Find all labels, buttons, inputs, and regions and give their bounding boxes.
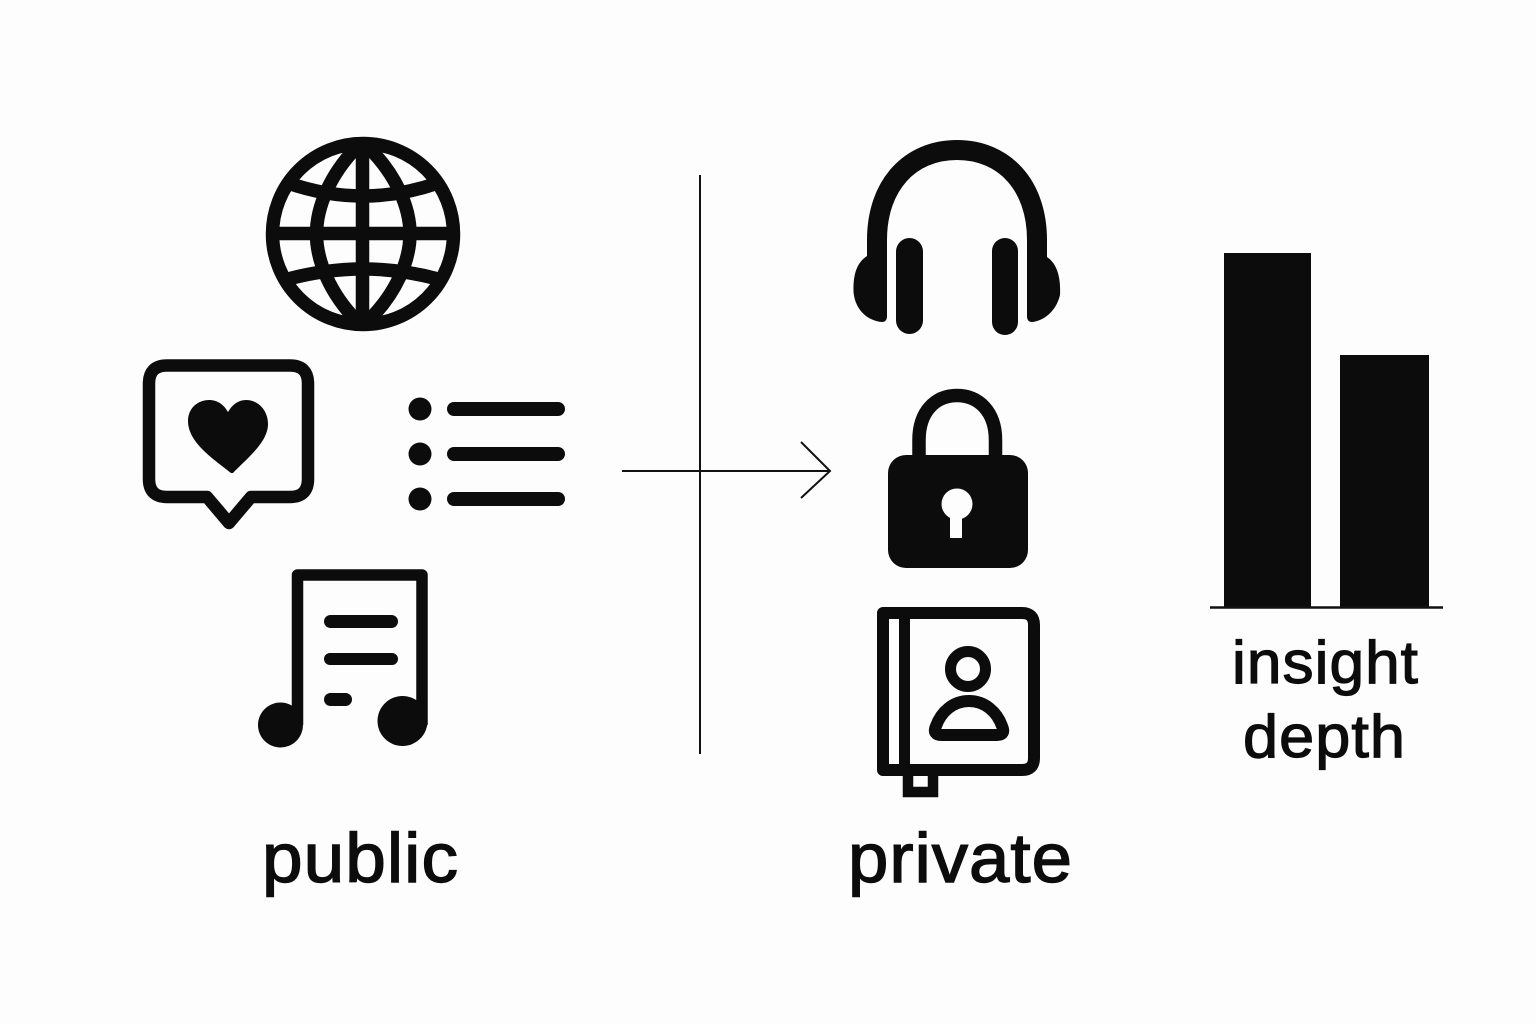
label: private: private [848, 819, 1073, 897]
icon: music note playlist [258, 575, 428, 748]
divider line [699, 175, 701, 754]
icon: padlock [888, 396, 1028, 568]
label: insight depth [1232, 629, 1419, 770]
icon: speech bubble with heart [149, 366, 308, 523]
icon: headphones [853, 150, 1060, 335]
icon: globe [272, 143, 454, 325]
arrow [622, 442, 830, 498]
bar chart: insight depth [1210, 253, 1443, 608]
icon: list [408, 398, 565, 510]
label: insight depth: depth [1243, 703, 1406, 770]
label: insight depth: insight [1232, 629, 1419, 696]
icon: contact book [883, 613, 1034, 792]
label: public: public [262, 819, 459, 897]
